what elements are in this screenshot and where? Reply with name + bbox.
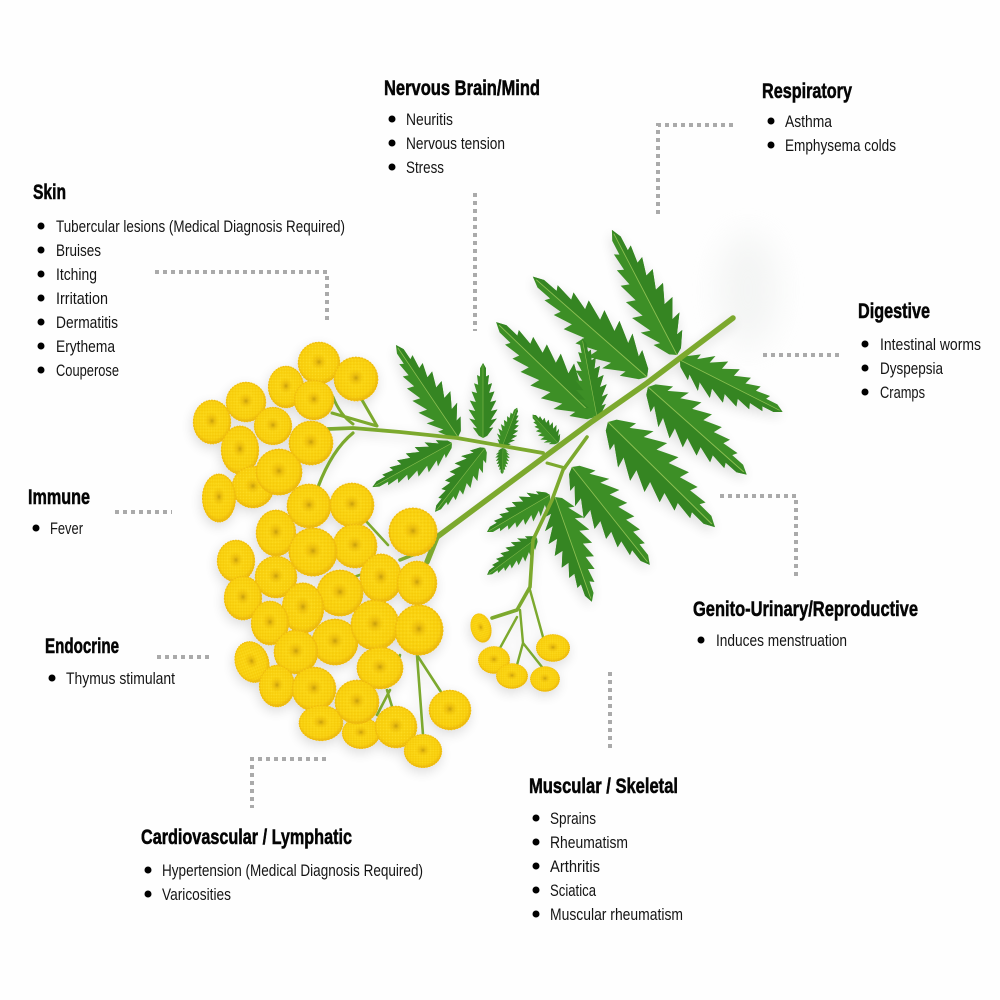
panel: digestive: Intestinal worms — [880, 336, 981, 354]
panel: respiratory: Respiratory — [762, 79, 852, 103]
connector: respiratory — [658, 125, 733, 216]
panel: nervous brain/mind: Stress — [406, 159, 444, 177]
panel: digestive: Cramps — [880, 384, 925, 402]
panel: skin: Itching — [56, 266, 97, 284]
small flower buds — [467, 611, 570, 692]
connector: skin — [155, 272, 327, 323]
connector: genito-urinary — [720, 496, 796, 579]
panel: respiratory: Asthma — [785, 113, 833, 131]
panel: genito-urinary/reproductive — [693, 597, 918, 650]
panel: muscular / skeletal: Sprains — [550, 810, 596, 828]
panel: muscular / skeletal — [529, 774, 683, 924]
panel: cardiovascular / lymphatic: Varicosities — [162, 886, 231, 904]
connector: immune — [115, 510, 172, 514]
panel: skin: Skin — [33, 180, 66, 204]
panel: skin: Tubercular lesions (Medical Diagnosis Required) — [56, 218, 345, 236]
panel: endocrine — [45, 634, 175, 688]
panel: skin — [33, 180, 345, 380]
panel: muscular / skeletal: Muscular rheumatism — [550, 906, 683, 924]
stems — [318, 318, 733, 735]
panel: respiratory — [762, 79, 896, 155]
panel: digestive — [858, 299, 981, 402]
panel: genito-urinary/reproductive: Genito-Urinary/Reproductive — [693, 597, 918, 621]
panel: skin: Erythema — [56, 338, 116, 356]
panel: cardiovascular / lymphatic: Cardiovascular / Lymphatic — [141, 825, 352, 849]
panel: digestive: Dyspepsia — [880, 360, 944, 378]
panel: nervous brain/mind: Nervous Brain/Mind — [384, 76, 540, 100]
panel: skin: Irritation — [56, 290, 108, 308]
panel: nervous brain/mind — [384, 76, 540, 177]
panel: cardiovascular / lymphatic: Hypertension (Medical Diagnosis Required) — [162, 862, 423, 880]
connector: endocrine — [157, 655, 210, 659]
connector: muscular — [608, 672, 612, 752]
panel: muscular / skeletal: Muscular / Skeletal — [529, 774, 678, 798]
leaves — [365, 219, 792, 609]
panel: nervous brain/mind: Nervous tension — [406, 135, 505, 153]
panel: skin: Bruises — [56, 242, 101, 260]
panel: skin: Couperose — [56, 362, 119, 380]
panel: muscular / skeletal: Sciatica — [550, 882, 597, 900]
panel: muscular / skeletal: Rheumatism — [550, 834, 628, 852]
panel: digestive: Digestive — [858, 299, 930, 323]
connector: nervous — [473, 193, 477, 331]
stem-end smudge — [718, 232, 778, 348]
flower cluster — [193, 342, 471, 768]
connector: cardiovascular — [252, 759, 326, 808]
panel: skin: Dermatitis — [56, 314, 118, 332]
panel: immune: Fever — [50, 520, 83, 538]
panel: endocrine: Thymus stimulant — [66, 670, 175, 688]
panel: immune: Immune — [28, 485, 90, 509]
connector: digestive — [763, 353, 839, 357]
panel: muscular / skeletal: Arthritis — [550, 858, 600, 876]
panel: cardiovascular / lymphatic — [141, 825, 423, 904]
panel: immune — [28, 485, 90, 538]
plant illustration — [193, 219, 792, 768]
panel: endocrine: Endocrine — [45, 634, 119, 658]
panel: respiratory: Emphysema colds — [785, 137, 896, 155]
panel: genito-urinary/reproductive: Induces menstruation — [716, 632, 847, 650]
panel: nervous brain/mind: Neuritis — [406, 111, 453, 129]
